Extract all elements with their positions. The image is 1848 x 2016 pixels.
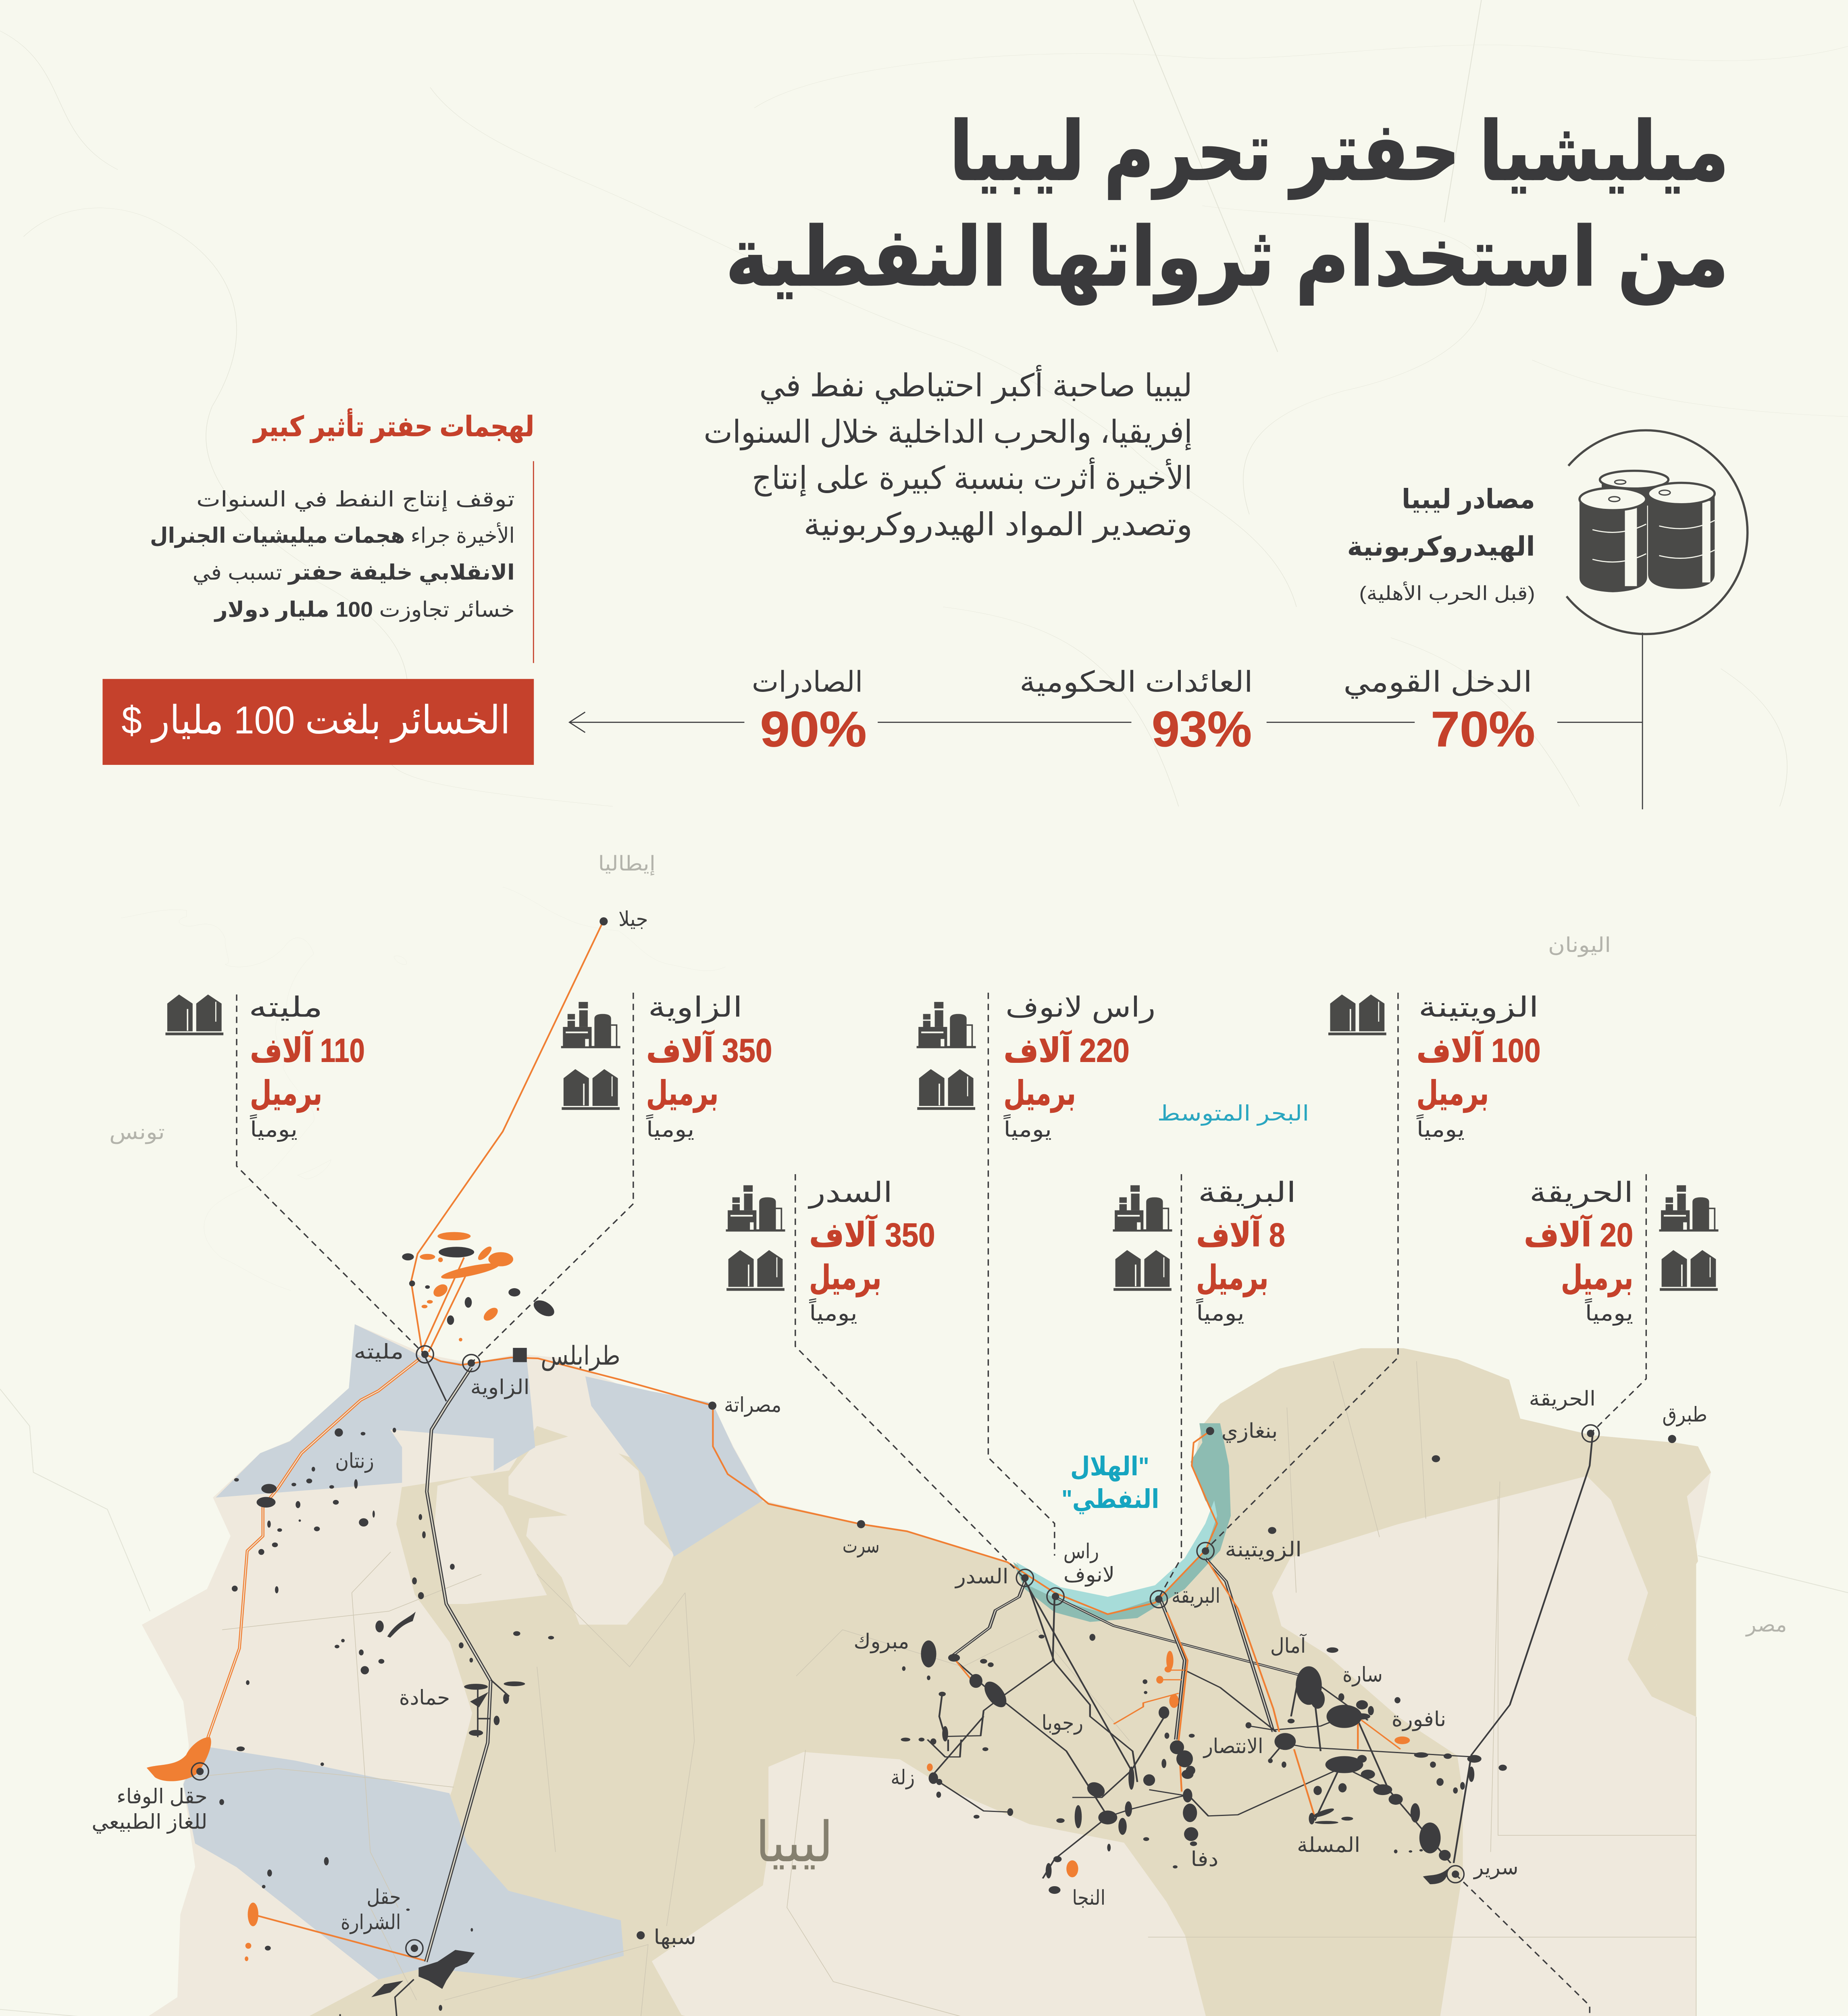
callout: losses box: الخسائر بلغت 100 مليار $ [121,699,510,743]
body text: الانقلابي خليفة حفتر تسبب في [193,561,515,585]
divider line [533,461,534,663]
map labels: places: راس [1063,1540,1099,1563]
callout: Zawiya [471,992,772,1363]
intro paragraph: وتصدير المواد الهيدروكربونية [803,506,1192,543]
map labels: places: سارة [1342,1663,1383,1687]
body text [150,487,515,622]
map labels: places: مبروك [853,1630,909,1654]
callout: Hariga: 20 آلاف [1524,1214,1633,1254]
body text: خسائر تجاوزت 100 مليار دولار [214,598,515,622]
heading: hydrocarbon sources: (قبل الحرب الأهلية) [1359,581,1535,605]
callout: Es Sider [726,1174,1024,1578]
map labels: places: الزاوية [470,1375,530,1399]
map labels: places: الحريقة [1529,1387,1596,1411]
callout: Es Sider: يومياً [809,1298,857,1326]
map labels: neighbouring countries: مصر [1745,1613,1787,1637]
intro paragraph: ليبيا صاحبة أكبر احتياطي نفط في [759,365,1192,404]
map: Libyan government territory [183,1324,763,1979]
label: oil crescent: النفطي" [1061,1485,1159,1514]
map labels: places: طبرق [1662,1403,1707,1427]
map labels: places: حقل [366,1885,401,1908]
callout: Brega: يومياً [1196,1298,1244,1326]
map: Libya base territory [142,1324,1711,2016]
callout: Brega: برميل [1196,1259,1268,1297]
map labels: places: رجوبا [1042,1711,1083,1735]
callout: Hariga: برميل [1561,1259,1633,1297]
map labels: places: الشرارة [341,1911,401,1935]
stat: national income [1343,666,1535,757]
stat: national income: الدخل القومي [1343,666,1532,699]
map labels: places: مصراتة [724,1393,781,1417]
map labels: places: النجا [1072,1886,1105,1909]
callout: Mellitah: يومياً [250,1114,298,1142]
map labels: places: مليته [354,1340,404,1363]
gas pipelines [207,921,1217,1960]
heading: hydrocarbon sources [1347,484,1535,605]
callout: Sarir [1455,1874,1660,2016]
callout: Mellitah: برميل [250,1074,322,1113]
callout: Zueitina: يومياً [1416,1114,1465,1142]
title [725,106,1729,305]
callout: Es Sider: 350 آلاف [809,1214,935,1254]
map labels: places: حمادة [399,1686,450,1709]
map labels: places: سبها [653,1925,696,1949]
heading: لهجمات حفتر تأثير كبير [253,408,534,443]
map labels: places: زلة [891,1766,915,1789]
map: central light areas [435,1429,674,1624]
intro paragraph: إفريقيا، والحرب الداخلية خلال السنوات [703,414,1192,451]
callout: Hariga: يومياً [1585,1298,1633,1326]
intro paragraph: الأخيرة أثرت بنسبة كبيرة على إنتاج [752,458,1192,497]
map labels: places: جيلا [618,908,648,931]
heading: hydrocarbon sources: الهيدروكربونية [1347,532,1535,562]
callout: Mellitah: مليته [249,992,323,1023]
stat: national income: 70% [1431,702,1535,757]
callout: Mellitah [165,992,424,1354]
map labels: neighbouring countries [97,852,1787,2016]
map labels: places: سرت [843,1534,880,1558]
stat: exports: الصادرات [752,666,863,699]
map labels: places: سرير [1473,1856,1518,1879]
map labels: places: نافورة [1392,1708,1446,1731]
map labels: places: دفا [1190,1847,1218,1870]
stat: exports: 90% [760,702,867,757]
callout: Ras Lanuf: راس لانوف [1005,992,1155,1024]
map labels: places: البريقة [1172,1584,1220,1608]
site markers [191,917,1676,2016]
callout: Zueitina: الزويتينة [1418,992,1539,1024]
label: oil crescent: "الهلال [1070,1452,1149,1482]
heading: hydrocarbon sources: مصادر ليبيا [1402,484,1535,514]
callout: Zueitina: برميل [1417,1074,1489,1113]
map labels: neighbouring countries: اليونان [1548,933,1611,957]
callout: Brega: البريقة [1198,1177,1296,1209]
callout: Es Sider: السدر [808,1177,893,1209]
map labels: places: السدر [954,1565,1008,1588]
callout: Mellitah: 110 آلاف [250,1030,365,1069]
stat: government revenue [1020,666,1253,757]
callout: Ras Lanuf: برميل [1004,1074,1076,1113]
map labels: places: طرابلس [541,1341,620,1371]
map labels: places: الانتصار [1203,1735,1263,1758]
map labels: places: بنغازي [1222,1419,1278,1443]
intro paragraph [703,365,1192,543]
panel: Haftar attacks impact [150,408,534,663]
oil crescent highlight [1013,1423,1231,1622]
map: faint internal roads and borders [185,1361,1696,2016]
arrow: sources to losses [569,633,1642,809]
callout: losses box [102,679,534,765]
gas fields west [147,1232,513,1961]
map labels: places: زنتان [335,1450,374,1473]
western oil pipelines [395,1356,509,2016]
callout: Zawiya: الزاوية [648,992,743,1024]
icon: oil barrels in circle [1567,430,1748,634]
map labels: places: الزويتينة [1225,1538,1302,1562]
label: Mediterranean Sea: البحر المتوسط [1157,1102,1309,1126]
map labels: places: آمال [1270,1633,1307,1657]
map labels: neighbouring countries: إيطاليا [598,852,656,876]
map labels: places: لانوف [1063,1563,1115,1587]
eastern gas fields [927,1651,1410,1877]
callout: Zawiya: يومياً [646,1114,694,1142]
callout: Brega: 8 آلاف [1196,1214,1285,1254]
map: Haftar militia territory [207,1348,1711,2016]
map labels: places [92,908,1707,2016]
map labels: places: المسلة [1297,1833,1360,1856]
callout: Hariga: الحريقة [1530,1177,1633,1209]
label: oil crescent [1061,1452,1159,1514]
western oil fields [219,1247,576,2016]
map labels: neighbouring countries: تونس [109,1120,165,1144]
callout: Zawiya: 350 آلاف [646,1030,772,1069]
callout: Zawiya: برميل [646,1074,718,1113]
stat: government revenue: العائدات الحكومية [1020,666,1253,699]
map label: Libya: ليبيا [755,1811,833,1873]
callout: Es Sider: برميل [809,1259,881,1297]
callout: Zueitina [1205,992,1541,1550]
stat: government revenue: 93% [1152,702,1252,757]
stat: exports [752,666,867,757]
callout: Ras Lanuf [917,992,1155,1556]
callout: Zueitina: 100 آلاف [1417,1030,1541,1069]
title: من استخدام ثرواتها النفطية [725,211,1729,305]
map labels: places: للغاز الطبيعي [92,1810,207,1833]
body text: توقف إنتاج النفط في السنوات [196,487,515,512]
map: eastern border strip [1611,1496,1696,1717]
map labels: places: حقل الوفاء [117,1785,207,1808]
eastern oil pipelines [928,1435,1592,1879]
callout: Ras Lanuf: يومياً [1003,1114,1052,1142]
eastern oil fields [901,1455,1507,1894]
callout: Hariga [1524,1174,1718,1433]
callout: Ras Lanuf: 220 آلاف [1004,1030,1130,1069]
eastern gas pipelines [954,1562,1401,1817]
body text: الأخيرة جراء هجمات ميليشيات الجنرال [150,522,515,548]
callout: Brega [1113,1174,1296,1598]
